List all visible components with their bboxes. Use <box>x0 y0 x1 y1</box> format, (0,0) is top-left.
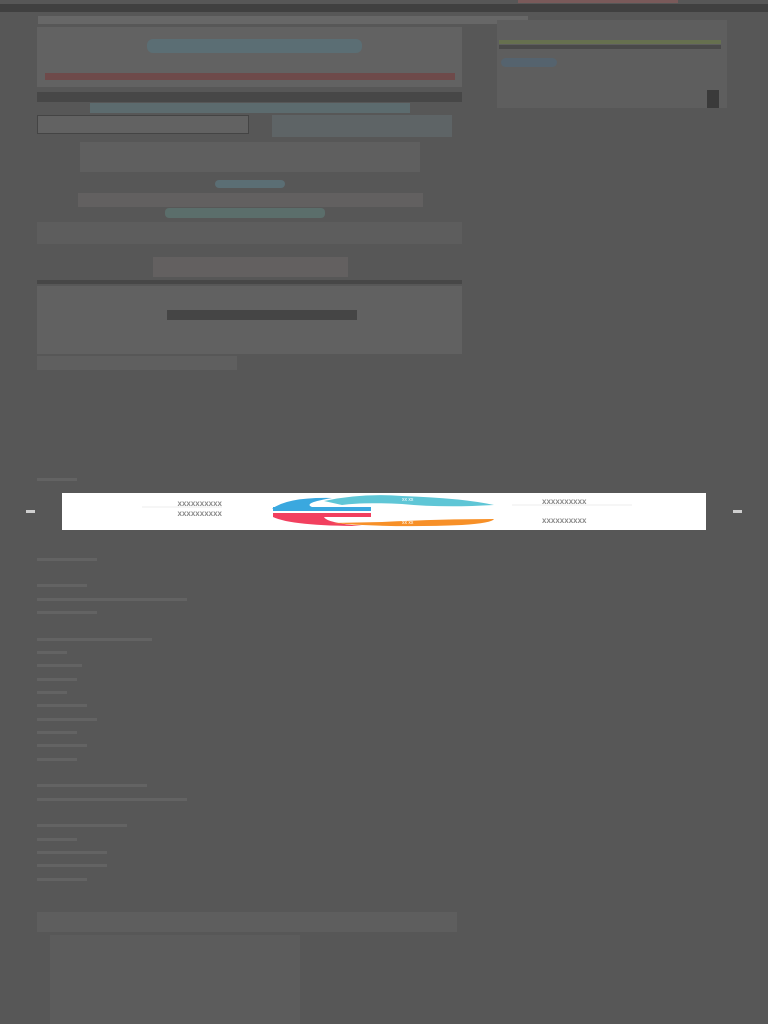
sidebar <box>497 20 727 108</box>
feature panel <box>37 115 249 134</box>
paragraph bottom <box>37 912 457 932</box>
left labels <box>142 499 223 518</box>
subtitle <box>80 142 420 172</box>
page title <box>38 16 528 24</box>
heading: wow your audience <box>90 103 410 113</box>
cycle diagram: xx xx <box>402 520 414 526</box>
lightbox image <box>62 493 706 530</box>
infographic preview panel <box>37 27 462 87</box>
left labels: xxxxxxxxxx <box>178 509 223 518</box>
right labels: xxxxxxxxxx <box>542 497 587 506</box>
top accent <box>518 0 678 3</box>
red banner <box>45 73 455 80</box>
nested list <box>50 935 300 1024</box>
arrow: next <box>733 510 742 513</box>
top bar <box>0 4 768 12</box>
list lines <box>37 478 187 881</box>
stat <box>215 180 285 188</box>
left labels: xxxxxxxxxx <box>178 499 223 508</box>
cycle diagram <box>272 495 494 526</box>
stat 6500+ <box>165 208 325 218</box>
dark divider <box>37 280 462 284</box>
big number <box>147 39 362 53</box>
thumbnails row <box>37 356 237 370</box>
paragraph <box>37 222 462 244</box>
text block <box>272 115 452 137</box>
bottom preview panel <box>37 286 462 354</box>
arrow: previous <box>26 510 35 513</box>
colour rows <box>78 193 423 207</box>
right labels <box>512 497 632 525</box>
table <box>153 257 348 277</box>
dark banner <box>37 92 462 102</box>
cycle diagram: xx xx <box>402 497 414 503</box>
right labels: xxxxxxxxxx <box>542 516 587 525</box>
